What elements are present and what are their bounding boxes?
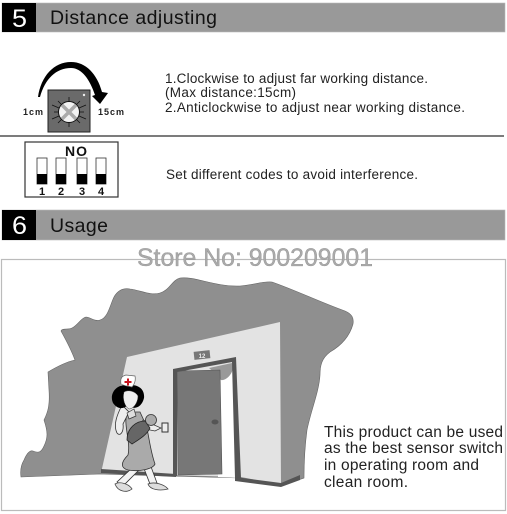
shape: room number sign: 12 — [199, 354, 206, 360]
shape: light wall — [101, 322, 281, 485]
icon: DIP switch block: NO — [65, 143, 87, 159]
text block: distance instructions: 2.Anticlockwise to adjust near working distance. — [165, 100, 465, 115]
section header: Usage: 6 — [12, 212, 27, 240]
section header: Distance adjusting — [2, 3, 505, 33]
text block: distance instructions — [165, 71, 465, 115]
text block: distance instructions: (Max distance:15cm) — [165, 85, 296, 100]
icon: distance dial with clockwise arrow: 15cm — [98, 107, 124, 117]
icon: DIP switch block — [25, 142, 118, 198]
text block: usage description — [324, 424, 503, 491]
text block: usage description: as the best sensor switch — [324, 440, 503, 457]
icon: DIP switch block: 2 — [58, 186, 64, 198]
icon: distance dial with clockwise arrow: 1cm — [23, 107, 43, 117]
watermark: store number: Store No: 900209001 — [137, 244, 373, 272]
shape: door — [177, 370, 222, 475]
icon: DIP switch block: 4 — [98, 186, 105, 198]
text block: usage description: in operating room and — [324, 457, 479, 474]
text block: distance instructions: 1.Clockwise to adjust far working distance. — [165, 71, 428, 86]
section header: Distance adjusting: Distance adjusting — [50, 7, 217, 29]
text block: usage description: clean room. — [324, 474, 408, 491]
shape: room number sign — [194, 350, 210, 360]
illustration: room scene — [21, 278, 353, 491]
shape: wall switch — [162, 423, 168, 432]
shape: dark background — [21, 278, 353, 486]
text block: DIP switch note: Set different codes to avoid interference. — [166, 167, 418, 182]
text block: usage description: This product can be used — [324, 424, 503, 441]
shape: white doorway opening — [218, 364, 239, 478]
icon: DIP switch block: 3 — [79, 186, 85, 198]
section header: Distance adjusting: 5 — [12, 5, 27, 33]
section header: Usage: Usage — [50, 215, 108, 237]
figure: nurse holding baby — [112, 375, 168, 491]
section header: Usage — [2, 210, 505, 240]
shape: baseboards — [101, 469, 300, 487]
panel: usage illustration frame — [2, 260, 506, 510]
icon: distance dial with clockwise arrow — [23, 62, 124, 132]
shape: door frame — [173, 357, 241, 478]
icon: DIP switch block: 1 — [39, 186, 45, 198]
